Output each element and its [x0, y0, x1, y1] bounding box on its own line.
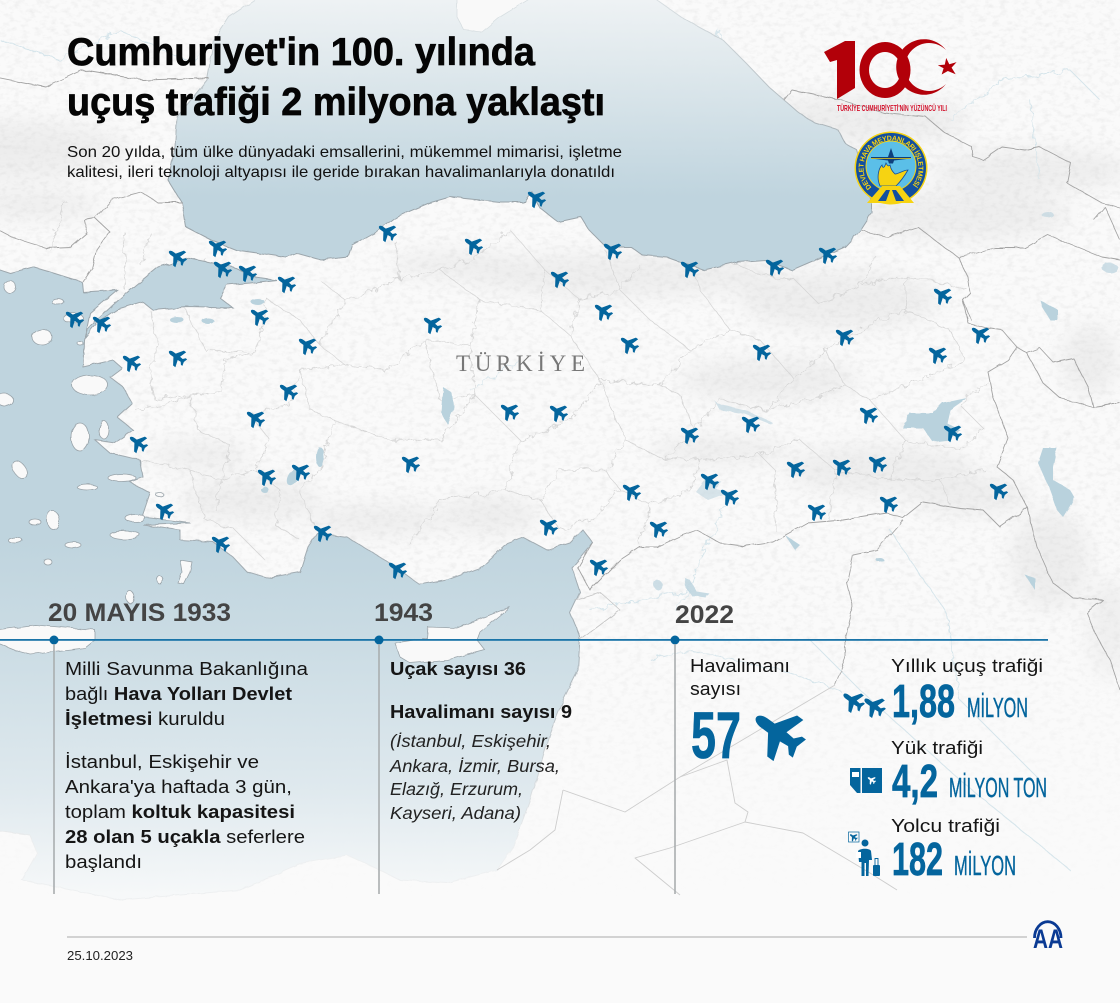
subtitle: [67, 144, 622, 181]
stat: airport count 57: Havalimanı: [690, 656, 790, 676]
text block: foundation: İşletmesi kuruldu: [65, 708, 225, 729]
icon: cargo container: [850, 768, 882, 793]
logo: DHMİ: [854, 132, 928, 204]
icon: passenger with suitcase: [848, 831, 880, 876]
text block: foundation: bağlı Hava Yolları Devlet: [65, 683, 292, 704]
subtitle: kalitesi, ileri teknoloji altyapısı ile geride bırakan havalimanlarıyla donatıldı: [67, 164, 615, 181]
stat: passenger traffic: Yolcu trafiği: [891, 816, 1000, 836]
stat: passenger traffic: [848, 816, 1016, 885]
stat: annual flight traffic: MİLYON: [967, 692, 1028, 723]
stat: cargo traffic: [850, 738, 1047, 807]
date: 25.10.2023: [67, 949, 133, 963]
text block: cities: [389, 731, 560, 823]
stat: annual flight traffic: 1,88: [892, 675, 955, 727]
heading: 2022: 2022: [675, 601, 734, 629]
logo: 100th anniversary: [824, 39, 958, 113]
text block: first flights: [65, 751, 305, 872]
icon: two airplanes: [837, 685, 890, 721]
stat: airport count 57: sayısı: [690, 679, 741, 699]
map label: TÜRKİYE: TÜRKİYE: [456, 351, 585, 376]
subtitle: Son 20 yılda, tüm ülke dünyadaki emsallerini, mükemmel mimarisi, işletme: [67, 144, 622, 161]
text block: cities: Ankara, İzmir, Bursa,: [389, 756, 560, 776]
heading: 20 Mayıs 1933: 20 MAYIS 1933: [48, 599, 231, 627]
lakes: [170, 212, 1118, 598]
text block: first flights: Ankara'ya haftada 3 gün,: [65, 776, 292, 797]
title: uçuş trafiği 2 milyona yaklaştı: [67, 81, 605, 124]
text block: cities: (İstanbul, Eskişehir,: [390, 731, 551, 751]
stat: passenger traffic: MİLYON: [954, 850, 1016, 881]
logo: 100th anniversary: TÜRKİYE CUMHURİYETİ'NİN YÜZÜNCÜ YILI: [837, 103, 947, 113]
timeline axis: [0, 636, 1048, 894]
logo: DHMİ: DEVLET HAVA MEYDANLARI İŞLETMESİ: [858, 136, 924, 190]
provincial boundaries: [50, 200, 990, 560]
text block: first flights: 28 olan 5 uçakla seferlere: [65, 826, 305, 847]
text block: foundation: Milli Savunma Bakanlığına: [65, 658, 309, 679]
national borders: [0, 70, 1120, 690]
text block: first flights: toplam koltuk kapasitesi: [65, 801, 295, 822]
stat: airport count: Havalimanı sayısı 9: [390, 701, 572, 722]
islands: [0, 0, 536, 663]
text block: cities: Kayseri, Adana): [390, 803, 521, 823]
panel: 1943: [374, 599, 572, 823]
stat: passenger traffic: 182: [892, 833, 943, 885]
title: [67, 31, 605, 124]
stat: airport count 57: 57: [691, 698, 741, 772]
stat: cargo traffic: MİLYON TON: [949, 772, 1047, 803]
stat: cargo traffic: Yük trafiği: [891, 738, 983, 758]
title: Cumhuriyet'in 100. yılında: [67, 31, 535, 74]
panel: 2022: [675, 601, 1047, 885]
stat: annual flight traffic: [837, 656, 1043, 727]
text block: first flights: başlandı: [65, 851, 142, 872]
stat: aircraft count: Uçak sayısı 36: [390, 658, 526, 679]
stat: annual flight traffic: Yıllık uçuş trafiği: [891, 656, 1043, 676]
icon: large airplane: [741, 697, 814, 769]
text block: foundation: [65, 658, 309, 729]
logo: Anadolu Agency: AA: [1033, 924, 1063, 954]
footer rule: [67, 936, 1027, 938]
stat: cargo traffic: 4,2: [892, 755, 938, 807]
text block: cities: Elazığ, Erzurum,: [390, 779, 523, 799]
heading: 1943: 1943: [374, 599, 433, 627]
seas: [0, 0, 872, 900]
airport markers: [61, 185, 1011, 582]
text block: first flights: İstanbul, Eskişehir ve: [65, 751, 259, 772]
stat: airport count 57: [690, 656, 814, 772]
panel: 20 Mayıs 1933: [48, 599, 309, 872]
